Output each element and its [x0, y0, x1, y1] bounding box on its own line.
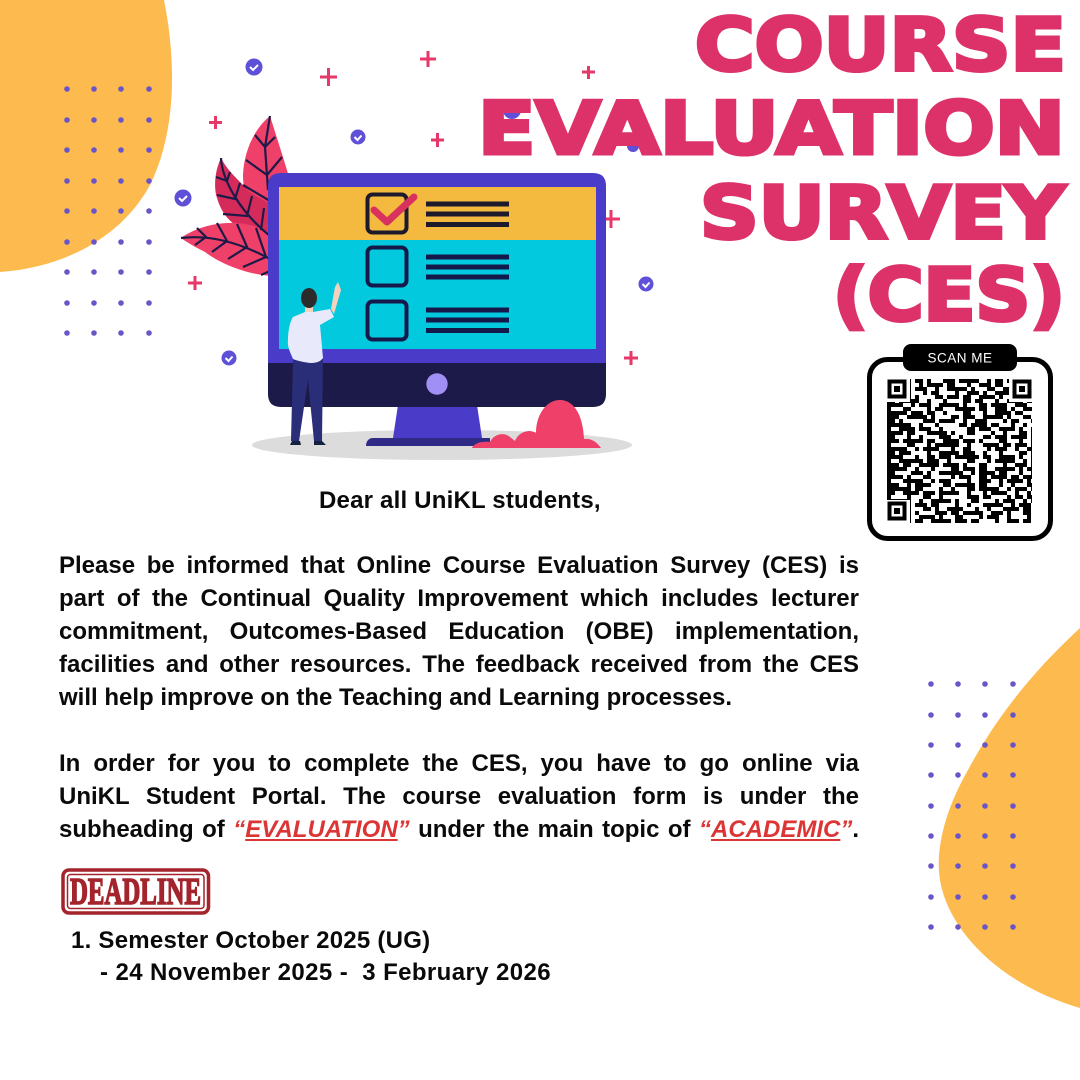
- survey row: empty 2: [368, 302, 509, 340]
- paragraph: how to complete: UniKL Student Portal. The course evaluation form is under the: [59, 783, 859, 810]
- decorative blob: bottom right: [939, 628, 1080, 1008]
- QR finder patterns: [887, 379, 1032, 523]
- survey row: empty 1: [368, 248, 509, 286]
- dot grid: top left: [64, 86, 152, 336]
- icon: purple check badges: [174, 58, 654, 366]
- paragraph: about CES: facilities and other resources. The feedback received from the CES: [59, 651, 859, 678]
- shadow under monitor: [252, 430, 632, 460]
- title: COURSE: [695, 3, 1066, 87]
- icon: pink plus marks: [188, 51, 638, 365]
- deadline stamp: DEADLINE: [70, 871, 201, 913]
- paragraph: about CES: Please be informed that Online Course Evaluation Survey (CES) is: [59, 552, 859, 579]
- paragraph: about CES: [59, 552, 859, 711]
- scan me tab: [903, 344, 1017, 371]
- QR code frame: [870, 344, 1050, 538]
- paragraph: how to complete: subheading of “EVALUATION” under the main topic of “ACADEMIC”.: [59, 816, 859, 843]
- title: [478, 3, 1066, 337]
- title: SURVEY: [700, 171, 1066, 255]
- icon: leaves behind monitor: [181, 116, 290, 276]
- dot grid: bottom right: [928, 681, 1016, 930]
- deadline list: - 24 November 2025 - 3 February 2026: [100, 959, 551, 986]
- deadline list: [71, 927, 551, 986]
- QR code pattern: [887, 381, 1032, 521]
- icon: pink bush: [472, 400, 601, 448]
- greeting: Dear all UniKL students,: [319, 487, 601, 514]
- monitor stand: [366, 405, 490, 446]
- decorative blob: top left: [0, 0, 172, 272]
- deadline stamp: [63, 870, 208, 913]
- paragraph: about CES: will help improve on the Teaching and Learning processes.: [59, 684, 732, 711]
- deadline list: 1. Semester October 2025 (UG): [71, 927, 430, 954]
- illustration: survey on computer monitor: [174, 51, 654, 460]
- title: (CES): [833, 253, 1065, 337]
- paragraph: about CES: part of the Continual Quality Improvement which includes lecturer: [59, 585, 859, 612]
- title: EVALUATION: [478, 86, 1065, 170]
- icon: person pointing at screen: [288, 282, 341, 445]
- paragraph: how to complete: In order for you to complete the CES, you have to go online via: [59, 750, 859, 777]
- paragraph: about CES: commitment, Outcomes-Based Education (OBE) implementation,: [59, 618, 859, 645]
- paragraph: how to complete: [59, 750, 860, 843]
- survey row: checked: [368, 194, 509, 232]
- scan me tab: SCAN ME: [927, 350, 993, 366]
- monitor body: [268, 173, 606, 407]
